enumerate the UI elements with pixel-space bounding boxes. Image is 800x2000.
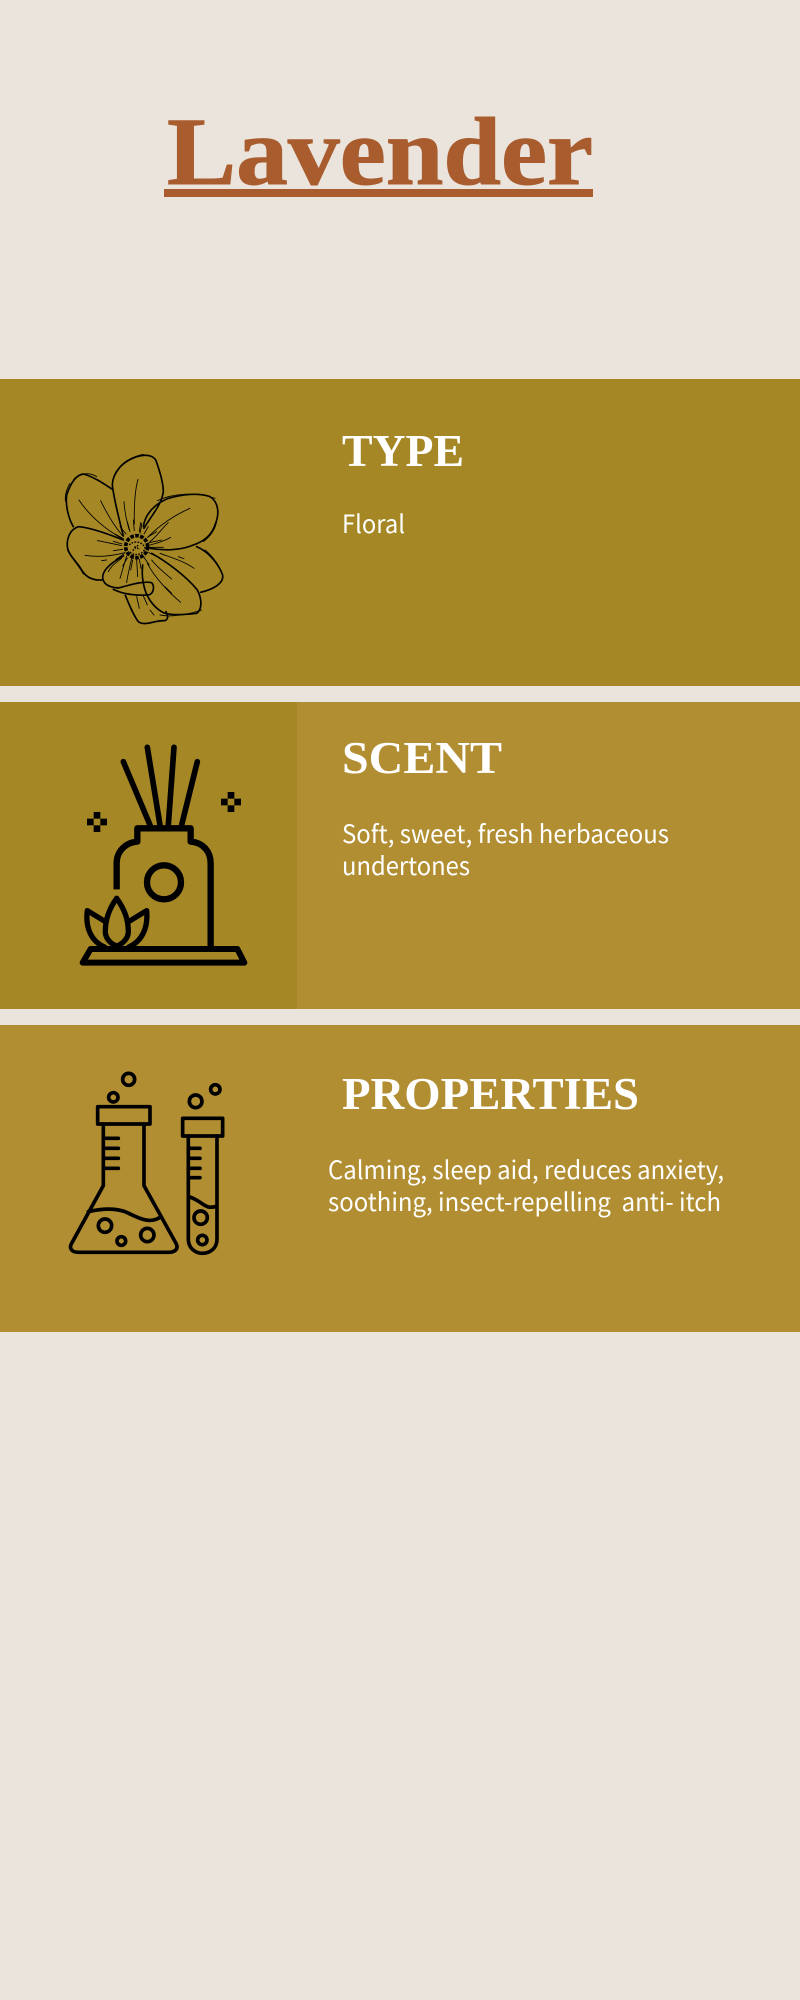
heading: properties: PROPERTIES <box>342 1069 639 1119</box>
text: properties description: soothing, insect-repelling anti- itch <box>328 1183 721 1219</box>
panel: scent <box>0 702 800 1009</box>
panel: properties <box>0 1025 800 1332</box>
text: scent description: undertones <box>342 847 470 883</box>
heading: type: TYPE <box>342 426 464 476</box>
heading: scent: SCENT <box>342 733 502 783</box>
icon: reed diffuser <box>83 747 244 963</box>
text: floral: Floral <box>342 505 405 541</box>
title: Lavender <box>167 98 593 205</box>
text: properties description: Calming, sleep aid, reduces anxiety, <box>328 1151 724 1187</box>
icon: flask and test tube <box>71 1073 223 1253</box>
text: scent description: Soft, sweet, fresh herbaceous <box>342 815 669 851</box>
icon: flower <box>65 454 223 624</box>
panel: type <box>0 379 800 686</box>
